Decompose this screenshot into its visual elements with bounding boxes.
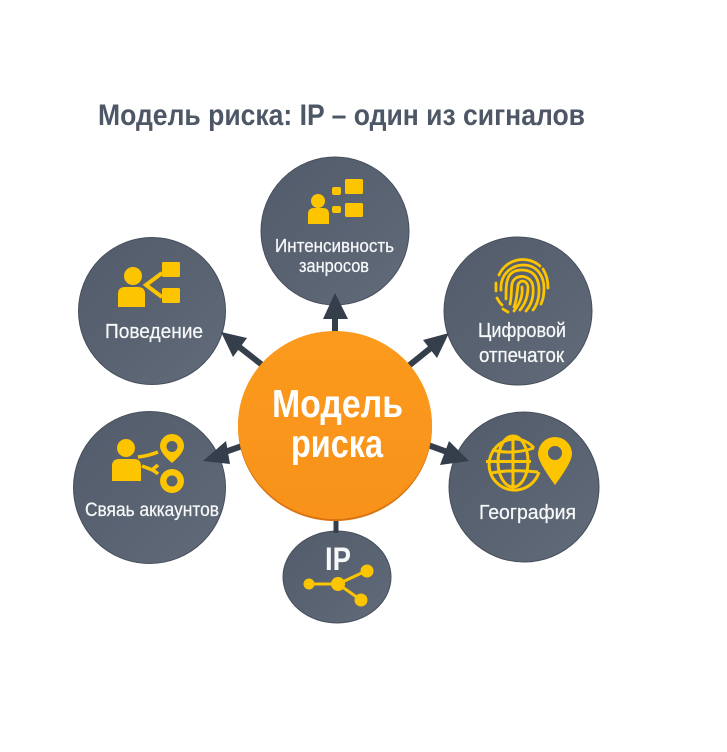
arrow: to account links	[203, 441, 245, 464]
label: behavior: Поведение	[105, 321, 203, 343]
icon: user with blocks	[308, 179, 363, 224]
panel: digital fingerprint	[444, 237, 592, 385]
label: geography: География	[479, 502, 576, 524]
label: IP: IP	[325, 541, 351, 577]
panel: central risk model	[238, 331, 432, 521]
panel: IP	[283, 531, 391, 623]
arrow: to fingerprint	[406, 333, 449, 368]
arrow: to behavior	[221, 332, 266, 368]
title: Модель риска: IP – один из сигналов	[98, 99, 585, 132]
icon: fingerprint	[496, 259, 548, 312]
panel: request intensity	[261, 157, 409, 305]
arrow: to request intensity	[323, 293, 348, 340]
arrow: to geography	[428, 441, 469, 465]
label: request intensity: Интенсивность	[275, 236, 394, 256]
label: risk model: Модель	[272, 383, 403, 426]
panel: geography	[449, 412, 599, 562]
icon: user with pins	[112, 434, 184, 493]
panel: behavior	[78, 238, 226, 384]
icon: location pin	[538, 437, 572, 485]
panel: account links	[74, 412, 226, 564]
label: digital fingerprint: Цифровой	[478, 320, 566, 342]
label: request intensity: занросов	[299, 256, 369, 276]
icon: user with branches	[118, 262, 180, 307]
label: account links: Свяаь аккаунтов	[85, 500, 219, 521]
icon: network nodes	[304, 564, 374, 606]
label: digital fingerprint: отпечаток	[479, 345, 564, 367]
icon: globe	[486, 436, 539, 490]
label: risk model: риска	[291, 423, 383, 466]
connector: to IP	[334, 515, 338, 533]
